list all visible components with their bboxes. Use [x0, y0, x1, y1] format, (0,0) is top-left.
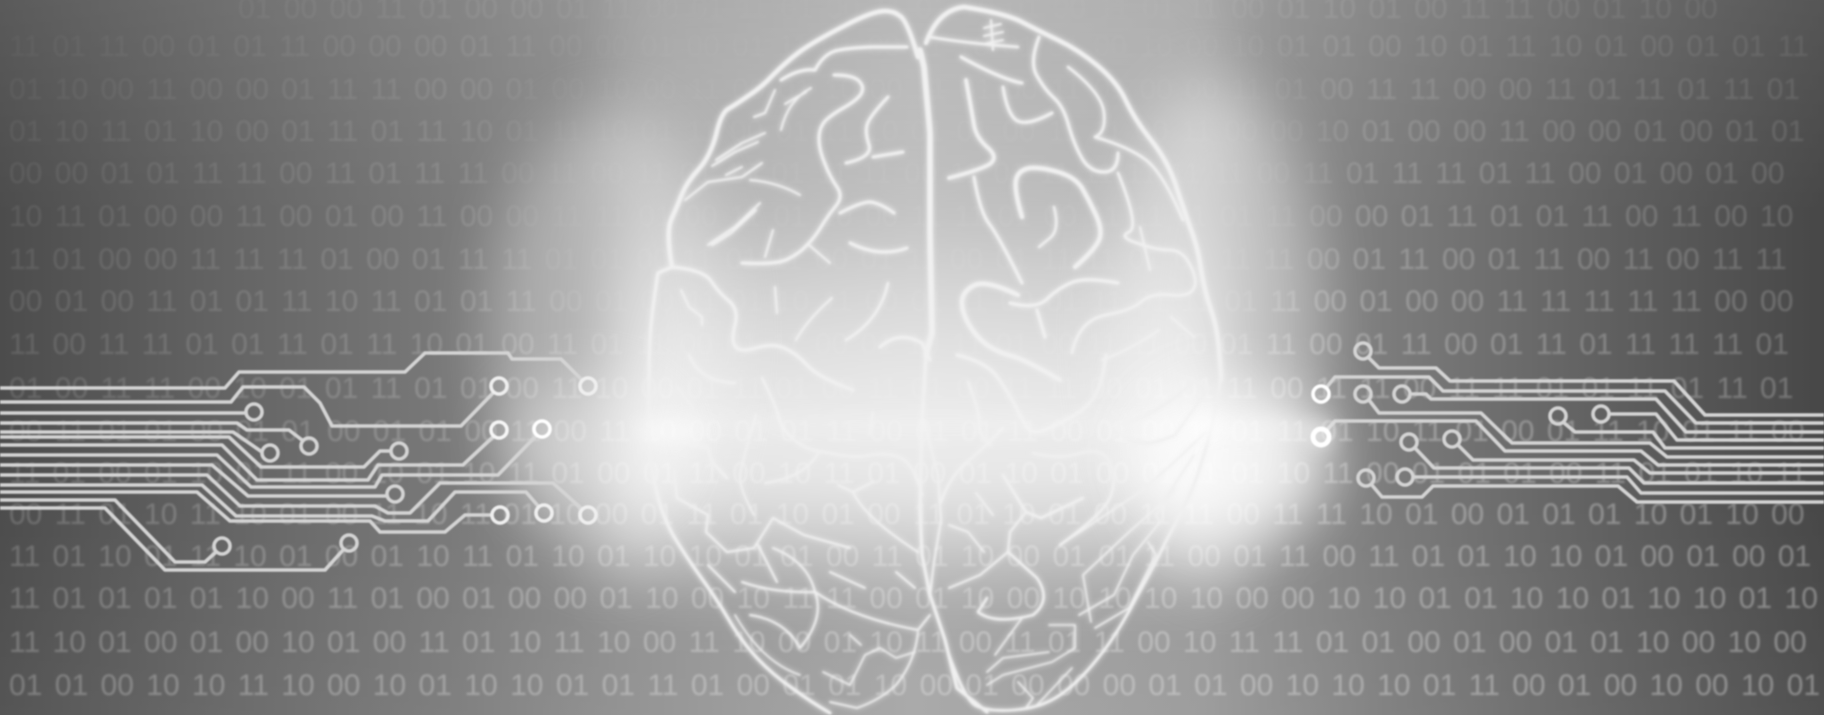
brain outline left hemisphere	[669, 11, 918, 267]
binary digits field: 11 01 10 01 11 10 01 00 01 10 11 01 10 01 10 10 01 01 00 11 01 10 00 01 01 11 00 01 11 00 11 01 01 10 10 01 00 01 00 01	[9, 540, 1811, 573]
binary digits field: 11 00 11 11 01 01 11 01 11 10 01 00 11 01 11 00 01 11 00 01 10 11 01 00 11 11 00 01 11 00 01 11 00 01 11 01 11 11 11 01	[9, 328, 1789, 361]
trace group left	[0, 353, 584, 388]
binary digits field: 11 01 00 00 11 11 11 01 00 01 11 11 01 01 00 11 01 11 00 01 11 00 01 11 11 01 01 11 11 00 01 11 00 01 11 00 11 00 11 11	[9, 243, 1787, 276]
binary digits field: 01 01 00 10 10 11 10 00 10 01 10 10 01 01 11 01 00 01 01 10 00 01 00 00 00 01 01 00 10 10 10 01 11 00 01 00 10 00 10 01	[9, 669, 1820, 702]
horizontal light flare	[630, 413, 1337, 446]
left circuit traces	[0, 353, 596, 570]
binary digits field: 11 10 01 00 01 00 10 01 00 11 01 10 11 10 00 11 10 00 01 10 11 00 11 01 11 00 10 11 11 01 01 00 01 00 01 01 10 00 10 00	[9, 626, 1807, 659]
binary digits field: 11 01 11 00 01 01 11 00 00 00 01 11 00 00 01 00 01 11 01 00 11 10 01 01 00 10 00 10 01 01 00 10 01 11 10 01 00 01 01 11	[9, 30, 1809, 63]
binary digits field: 01 00 11 11 00 10 01 01 11 01 01 00 11 10 00 01 11 01 00 11 01 00 11 11 00 01 01 11 00 11 11 00 11 11 01 01 11 01 11 01	[9, 372, 1793, 405]
trace group right	[1368, 357, 1824, 415]
central white glow	[490, 0, 1330, 610]
binary digits field: 01 10 11 01 10 00 01 11 01 11 10 01 11 10 01 11 00 01 11 10 01 01 00 11 11 00 11 00 00 10 01 00 00 11 00 00 01 00 01 01	[9, 115, 1805, 148]
binary digits field: 00 11 01 10 11 10 01 00 11 10 11 01 10 00 01 11 01 10 01 00 11 01 10 01 00 11 11 00 11 11 10 01 00 01 01 01 10 01 10 00	[9, 498, 1805, 531]
brain outline right hemisphere	[926, 7, 1221, 380]
midline fissure	[920, 50, 932, 355]
brain line drawing	[649, 7, 1221, 713]
binary digits field: 00 00 01 01 11 11 00 11 01 11 11 00 11 00 11 01 10 01 11 11 00 11 01 11 11 11 11 11 00 11 01 11 11 01 11 00 01 00 01 00	[9, 157, 1784, 190]
binary digits field: 11 01 01 01 01 10 00 11 01 00 01 00 00 01 10 00 10 11 11 00 01 10 00 10 10 10 10 00 00 10 10 01 01 10 10 01 10 10 01 10	[9, 582, 1818, 615]
binary digits field: 00 01 00 11 01 01 11 10 11 01 01 11 00 01 00 11 01 10 11 00 01 11 00 01 11 01 11 01 11 00 01 00 00 11 11 11 11 11 00 00	[9, 285, 1793, 318]
right hemisphere gyri	[930, 37, 1018, 47]
left hemisphere gyri	[781, 47, 907, 80]
binary digits field: 11 01 00 01 10 01 11 00 10 01 10 11 01 00 01 11 00 10 11 01 00 01 10 01 00 01 11 01 10 11 00 01 01 01 00 11 01 01 10 11	[9, 457, 1807, 490]
binary digits field: 00 11 01 01 00 01 01 00 01 01 00 11 00 11 10 00 01 01 11 00 01 01 11 00 01 00 11 01 11 01 10 11 01 00 01 11 10 01 11 00	[9, 415, 1805, 448]
binary digits field: 10 11 01 00 00 11 00 01 00 11 00 00 11 11 01 00 11 01 10 00 11 11 01 00 11 11 11 01 11 00 00 01 11 01 01 11 00 11 00 10	[9, 200, 1793, 233]
binary digits field: 01 10 00 11 00 00 01 11 11 00 00 01 00 10 00 11 00 01 10 00 11 01 00 11 01 00 00 11 01 00 11 11 00 00 11 01 11 01 11 01	[9, 73, 1800, 106]
right circuit traces	[1313, 343, 1824, 502]
lower right gyri	[957, 355, 1106, 432]
